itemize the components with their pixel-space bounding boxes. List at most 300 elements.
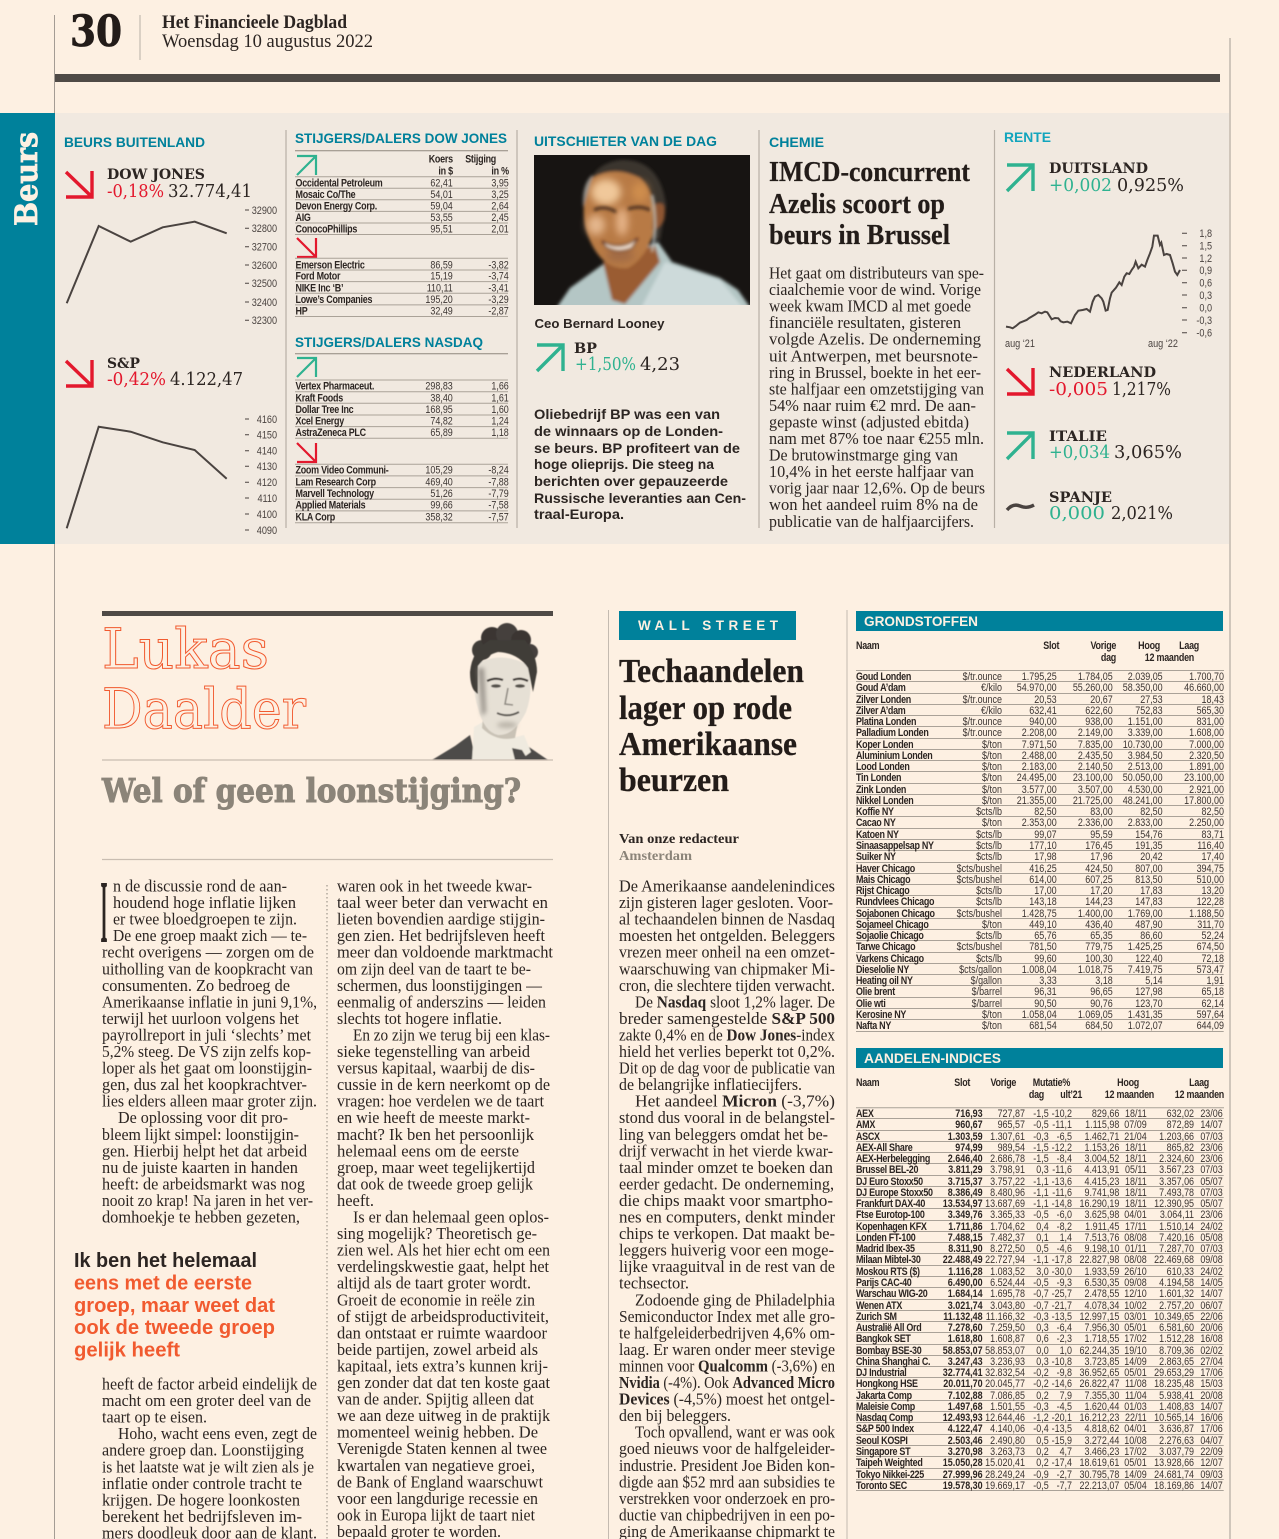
- table: Nasdaq stijgers: Kraft Foods: [296, 393, 344, 405]
- columnist name: [102, 617, 307, 741]
- table: aandelen-indices: -0,2: [1033, 1367, 1049, 1379]
- line chart: S&P: 4110: [257, 493, 277, 505]
- table: aandelen-indices: 58.853,07: [943, 1345, 983, 1357]
- text block: column part 1: Amerikaanse inflatie in juni 9,1%,: [102, 992, 317, 1011]
- text block: chemie: ciaalchemie voor de wind. Vorige: [769, 280, 981, 299]
- table: grondstoffen: 2.435,50: [1078, 750, 1113, 762]
- line chart: Duitse rente: 0,6: [1199, 278, 1212, 290]
- table: aandelen-indices: 22/06: [1200, 1311, 1223, 1323]
- table: grondstoffen: 607,25: [1085, 874, 1113, 886]
- table: aandelen-indices: 27/04: [1200, 1356, 1223, 1368]
- headline: Azelis scoort op: [769, 188, 945, 220]
- text block: column part 3: Groeit de economie in reële zin: [337, 1290, 535, 1309]
- table: aandelen-indices: 12/07: [1200, 1457, 1223, 1469]
- table: grondstoffen: 2.513,00: [1128, 761, 1163, 773]
- table: aandelen-indices: 21/04: [1124, 1131, 1147, 1143]
- text block: column part 3: ook in Europa lijkt de taart niet: [337, 1505, 535, 1524]
- table: aandelen-indices: Taipeh Weighted: [856, 1457, 923, 1469]
- table: aandelen-indices: 1.512,28: [1159, 1333, 1194, 1345]
- table: aandelen-indices: 20/06: [1200, 1322, 1223, 1334]
- table: grondstoffen: 779,75: [1085, 941, 1113, 953]
- column headers: [856, 1077, 1224, 1101]
- table: grondstoffen: 127,98: [1135, 986, 1163, 998]
- table: aandelen-indices: 2.646,40: [948, 1153, 983, 1165]
- line chart: Dow Jones: 32500: [252, 278, 277, 290]
- table: aandelen-indices: -11,6: [1052, 1187, 1072, 1199]
- table: aandelen-indices: 05/08: [1200, 1232, 1223, 1244]
- table: grondstoffen: $/ton: [982, 739, 1002, 751]
- table: Dow Jones stijgers: Occidental Petroleum: [296, 178, 383, 190]
- table: grondstoffen: Goud Londen: [856, 671, 911, 683]
- table: aandelen-indices: Londen FT-100: [856, 1232, 915, 1244]
- text block: chemie: Het gaat om distributeurs van spe-: [769, 264, 984, 282]
- table: aandelen-indices: -0,7: [1033, 1288, 1049, 1300]
- table: grondstoffen: 2.833,00: [1128, 817, 1163, 829]
- table: Dow Jones dalers: -3,74: [488, 271, 509, 283]
- text block: Wall Street article: Het aandeel Micron (-3,7%): [635, 1092, 835, 1111]
- table: grondstoffen: 17,98: [1034, 851, 1057, 863]
- table: grondstoffen: 17,96: [1090, 851, 1113, 863]
- table: Dow Jones dalers: 86,59: [430, 260, 453, 272]
- table: grondstoffen: 191,35: [1135, 840, 1163, 852]
- Italie label: ITALIE: [1049, 429, 1107, 445]
- table: grondstoffen: $/ton: [982, 750, 1002, 762]
- text block: Wall Street article: De Nasdaq sloot 1,2% lager. De: [635, 992, 835, 1011]
- text block: Wall Street article: breder samengestelde S&P 500: [619, 1009, 835, 1028]
- table: grondstoffen: 2.149,00: [1078, 727, 1113, 739]
- table: grondstoffen: 46.660,00: [1184, 682, 1224, 694]
- table: grondstoffen: $cts/lb: [976, 885, 1002, 897]
- table: grondstoffen: Koper Londen: [856, 739, 913, 751]
- table: aandelen-indices: 18.235,48: [1154, 1378, 1194, 1390]
- table: aandelen-indices: 3.798,91: [990, 1164, 1025, 1176]
- table: grondstoffen: 684,50: [1085, 1020, 1113, 1032]
- table: aandelen-indices: 3.625,98: [1084, 1209, 1119, 1221]
- text block: Wall Street article: cron, die slechtere tijden verwacht.: [619, 976, 835, 995]
- table: aandelen-indices: 1.620,44: [1084, 1401, 1119, 1413]
- headline: [619, 653, 804, 799]
- column headers: Hoog: [1138, 640, 1160, 652]
- table: grondstoffen: 17,00: [1034, 885, 1057, 897]
- table: Dow Jones stijgers: Mosaic Co/The: [296, 189, 356, 201]
- line chart: Duitse rente: 1,8: [1199, 228, 1212, 240]
- table: aandelen-indices: [856, 1108, 1224, 1492]
- table: aandelen-indices: 18.169,86: [1154, 1480, 1194, 1492]
- table: aandelen-indices: 1.408,83: [1159, 1401, 1194, 1413]
- table: Nasdaq stijgers: 1,60: [491, 404, 509, 416]
- text block: column part 2: is het laatste wat je wilt zien als je: [102, 1457, 314, 1476]
- table: grondstoffen: Kerosine NY: [856, 1009, 906, 1021]
- table: aandelen-indices: 6.490,00: [948, 1277, 983, 1289]
- table: grondstoffen: 122,28: [1197, 896, 1224, 908]
- table: aandelen-indices: -6,5: [1057, 1131, 1072, 1143]
- table: grondstoffen: 20,53: [1034, 694, 1057, 706]
- table: aandelen-indices: Nasdaq Comp: [856, 1412, 913, 1424]
- table: aandelen-indices: 02/02: [1200, 1345, 1223, 1357]
- table: Dow Jones dalers: NIKE Inc ‘B’: [296, 283, 344, 295]
- column headers: [856, 640, 1199, 664]
- date: Woensdag 10 augustus 2022: [162, 31, 373, 52]
- table: grondstoffen: 1.795,25: [1022, 671, 1057, 683]
- line chart: Duitse rente: 1,2: [1199, 253, 1212, 265]
- table: aandelen-indices: 22/11: [1125, 1412, 1147, 1424]
- table: grondstoffen: 487,90: [1135, 919, 1163, 931]
- table: Nasdaq dalers: 469,40: [425, 477, 453, 489]
- table: aandelen-indices: 18/11: [1125, 1198, 1147, 1210]
- table: aandelen-indices: -15,9: [1052, 1435, 1072, 1447]
- table: grondstoffen: €/kilo: [981, 705, 1002, 717]
- table: aandelen-indices: 1.711,86: [948, 1221, 983, 1233]
- text block: column part 3: verdelingskwestie gaat, helpt het: [337, 1257, 549, 1276]
- text block: Wall Street article: ling van beleggers omdat het be-: [619, 1125, 828, 1144]
- table: grondstoffen: 3,33: [1039, 975, 1057, 987]
- table: grondstoffen: 674,50: [1197, 941, 1224, 953]
- table: grondstoffen: $/tr.ounce: [963, 727, 1002, 739]
- table: grondstoffen: 17,20: [1090, 885, 1113, 897]
- text block: column part 3: de Bank of England waarschuwt: [337, 1472, 543, 1491]
- table: aandelen-indices: 716,93: [955, 1108, 983, 1120]
- table: aandelen-indices: Singapore ST: [856, 1446, 910, 1458]
- table: aandelen-indices: 610,33: [1167, 1266, 1194, 1278]
- Nederland value: [1049, 379, 1171, 400]
- text block: column part 2: Hoho, wacht eens even, zegt de: [118, 1424, 317, 1443]
- table header: in %: [491, 166, 509, 178]
- table: aandelen-indices: 0,1: [1036, 1232, 1049, 1244]
- table: aandelen-indices: 16/06: [1200, 1412, 1223, 1424]
- table: grondstoffen: 5,14: [1145, 975, 1163, 987]
- table: Dow Jones dalers: -3,82: [488, 260, 509, 272]
- table: Dow Jones stijgers: 95,51: [430, 224, 453, 236]
- table: grondstoffen: 7.419,75: [1128, 964, 1163, 976]
- table: aandelen-indices: 09/08: [1124, 1277, 1147, 1289]
- table: aandelen-indices: 13.687,69: [985, 1198, 1025, 1210]
- table: grondstoffen: 2.336,00: [1078, 817, 1113, 829]
- panel: aandelen-indices heading: AANDELEN-INDICES: [864, 1051, 1001, 1066]
- text block: Wall Street article: ductie van chipbedrijven in een po-: [619, 1505, 835, 1524]
- text block: column part 3: gen zonder dat dat ten koste gaat: [337, 1373, 550, 1392]
- table: grondstoffen: $cts/lb: [976, 896, 1002, 908]
- table: grondstoffen: 72,18: [1202, 953, 1224, 965]
- table: aandelen-indices: 3.064,11: [1160, 1209, 1194, 1221]
- table: aandelen-indices: 13.534,97: [943, 1198, 983, 1210]
- table: Dow Jones dalers: HP: [296, 306, 308, 318]
- panel: chemie heading: [769, 134, 970, 251]
- table: Dow Jones stijgers: 62,41: [430, 178, 453, 190]
- table: grondstoffen: 20,67: [1090, 694, 1113, 706]
- text block: column part 3: altijd als de taart groter wordt.: [337, 1274, 531, 1293]
- markets band background: [55, 113, 1229, 544]
- headline: beurs in Brussel: [769, 219, 950, 251]
- table: aandelen-indices: 2.478,55: [1084, 1288, 1119, 1300]
- table: aandelen-indices: 632,02: [1167, 1108, 1194, 1120]
- panel: grondstoffen heading: GRONDSTOFFEN: [864, 614, 978, 629]
- text block: Wall Street article: zijn gisteren lager gesloten. Voor-: [619, 893, 833, 912]
- text block: column part 3: kapitaal, iets extra’s kunnen krij-: [337, 1356, 548, 1375]
- table: grondstoffen: 622,60: [1085, 705, 1113, 717]
- line chart: Duitse rente: -0,3: [1196, 315, 1212, 327]
- table: aandelen-indices: 5.938,41: [1159, 1390, 1194, 1402]
- table: aandelen-indices: 3.365,33: [990, 1209, 1025, 1221]
- table: grondstoffen: 48.241,00: [1123, 795, 1163, 807]
- text block: column part 2: heeft de factor arbeid eindelijk de: [102, 1374, 317, 1394]
- table: aandelen-indices: 1.601,32: [1159, 1288, 1194, 1300]
- table: grondstoffen: 154,76: [1135, 829, 1163, 841]
- table: grondstoffen: 1.769,00: [1128, 908, 1163, 920]
- table: aandelen-indices: 07/03: [1200, 1187, 1223, 1199]
- table: aandelen-indices: 23/06: [1200, 1153, 1223, 1165]
- table: grondstoffen: 82,50: [1140, 806, 1163, 818]
- table: aandelen-indices: Bombay BSE-30: [856, 1345, 921, 1357]
- table: grondstoffen: 2.140,50: [1078, 761, 1113, 773]
- table: aandelen-indices: 1.116,28: [948, 1266, 983, 1278]
- table: aandelen-indices: 3.272,44: [1084, 1435, 1119, 1447]
- table: Nasdaq dalers: [295, 464, 509, 524]
- table: aandelen-indices: 7.259,50: [990, 1322, 1025, 1334]
- table: grondstoffen: 99,07: [1034, 829, 1057, 841]
- table: grondstoffen: 144,23: [1085, 896, 1113, 908]
- table: aandelen-indices: -0,9: [1033, 1468, 1049, 1480]
- table: aandelen-indices: 3.021,74: [948, 1300, 983, 1312]
- line chart: Dow Jones: [67, 205, 277, 327]
- line chart: Duitse rente: aug ‘21: [1005, 338, 1035, 350]
- table: aandelen-indices: -21,7: [1052, 1300, 1072, 1312]
- table: aandelen-indices: 12.997,15: [1079, 1311, 1119, 1323]
- text block: column part 3: gen zien. Het bedrijfsleven heeft: [337, 926, 545, 945]
- table: grondstoffen: 813,50: [1135, 874, 1163, 886]
- table: grondstoffen: 3.577,00: [1022, 784, 1057, 796]
- text block: Wall Street article: drijf verwacht in het vierde kwar-: [619, 1141, 833, 1160]
- table: grondstoffen: 86,60: [1140, 930, 1163, 942]
- text block: column part 3: kwartalen van negatieve groei,: [337, 1456, 535, 1475]
- table: aandelen-indices: 22.727,94: [985, 1254, 1025, 1266]
- text block: column part 3: vragen: hoe verdelen we de taart: [337, 1092, 544, 1111]
- table: grondstoffen: Lood Londen: [856, 761, 910, 773]
- panel: uitschieter van de dag: [534, 133, 750, 522]
- column headers: Vorige: [1090, 640, 1117, 652]
- line chart: S&P: 4140: [257, 446, 277, 458]
- S&P value: 4.122,47: [170, 369, 243, 390]
- text block: Wall Street article: den bij beleggers.: [619, 1406, 731, 1425]
- table: aandelen-indices: 3.715,37: [948, 1176, 983, 1188]
- table: aandelen-indices: 18/11: [1125, 1153, 1147, 1165]
- table: grondstoffen: Katoen NY: [856, 829, 899, 841]
- text block: column part 3: we aan deze uitweg in de praktijk: [337, 1406, 551, 1425]
- text block: column part 3: eenmalig of anderszins — leiden: [337, 992, 546, 1011]
- table: grondstoffen: [856, 671, 1224, 1032]
- text block: BP: Russische leveranties aan Cen-: [534, 490, 746, 506]
- heading: BEURS BUITENLAND: [64, 134, 205, 150]
- table: aandelen-indices: 11/08: [1125, 1378, 1147, 1390]
- icon: green arrow up: [297, 156, 316, 175]
- table: grondstoffen: 1.072,07: [1128, 1020, 1163, 1032]
- panel: aandelen-indices heading: [856, 1048, 1224, 1108]
- text block: column part 1: De oplossing voor dit pro-: [118, 1108, 288, 1127]
- table: aandelen-indices: 1.153,26: [1084, 1142, 1119, 1154]
- table: grondstoffen: 1.018,75: [1078, 964, 1113, 976]
- table: grondstoffen: 90,50: [1034, 998, 1057, 1010]
- table: Nasdaq stijgers: 65,89: [430, 427, 453, 439]
- table: aandelen-indices: 3.004,52: [1084, 1153, 1119, 1165]
- table: grondstoffen: 27,53: [1140, 694, 1163, 706]
- table: aandelen-indices: 17/02: [1124, 1333, 1147, 1345]
- text block: Wall Street article: Toch opvallend, want er was ook: [635, 1423, 836, 1442]
- table: aandelen-indices: 974,99: [955, 1142, 983, 1154]
- table: grondstoffen: Sojameel Chicago: [856, 919, 929, 931]
- table: grondstoffen: 95,59: [1090, 829, 1113, 841]
- table: grondstoffen: Zilver Londen: [856, 694, 911, 706]
- table: aandelen-indices: 3.236,93: [990, 1356, 1025, 1368]
- table: aandelen-indices: 0,3: [1036, 1322, 1049, 1334]
- table: aandelen-indices: 0,0: [1036, 1345, 1049, 1357]
- table: Nasdaq dalers: Applied Materials: [296, 500, 366, 512]
- table: Nasdaq dalers: -7,88: [488, 477, 509, 489]
- table: aandelen-indices: 14/07: [1200, 1119, 1223, 1131]
- table: grondstoffen: 54.970,00: [1017, 682, 1057, 694]
- table: aandelen-indices: -0,2: [1033, 1378, 1049, 1390]
- table: aandelen-indices: Tokyo Nikkei-225: [856, 1468, 924, 1480]
- text block: column part 2: krijgen. De hogere loonkosten: [102, 1490, 300, 1509]
- table: Nasdaq dalers: -7,58: [488, 500, 509, 512]
- table: aandelen-indices: 0,2: [1036, 1446, 1049, 1458]
- line chart: Duitse rente: 0,9: [1199, 265, 1212, 277]
- table: grondstoffen: 449,10: [1029, 919, 1057, 931]
- table: grondstoffen: 58.350,00: [1123, 682, 1163, 694]
- table: aandelen-indices: -1,5: [1033, 1142, 1049, 1154]
- text block: BP: berichten over gepauzeerde: [534, 473, 728, 489]
- table: grondstoffen: 1.700,70: [1189, 671, 1224, 683]
- table: aandelen-indices: 8.311,90: [948, 1243, 983, 1255]
- text block: Wall Street article: Semiconductor Index met alle gro-: [619, 1307, 835, 1326]
- table: aandelen-indices: 1.501,55: [990, 1401, 1025, 1413]
- text block: chemie: De brutowinstmarge ging van: [769, 446, 958, 465]
- table: aandelen-indices: 07/09: [1124, 1119, 1147, 1131]
- table: grondstoffen: 1.608,00: [1189, 727, 1224, 739]
- table: grondstoffen: $/barrel: [972, 986, 1002, 998]
- table: aandelen-indices: Moskou RTS ($): [856, 1266, 920, 1278]
- Spanje value: 2,021%: [1111, 503, 1173, 524]
- table: aandelen-indices: 10.349,65: [1154, 1311, 1194, 1323]
- table: aandelen-indices: 0,3: [1036, 1356, 1049, 1368]
- text block: column part 3: momenteel weinig hebben. De: [337, 1423, 538, 1442]
- table: aandelen-indices: 3.723,85: [1084, 1356, 1119, 1368]
- Italie value: +0,034: [1049, 442, 1110, 463]
- table: aandelen-indices: 10/02: [1124, 1300, 1147, 1312]
- table: Nasdaq dalers: -8,24: [488, 465, 509, 477]
- table: aandelen-indices: 3.247,43: [948, 1356, 983, 1368]
- heading: RENTE: [1004, 129, 1051, 145]
- Duitsland value: 0,925%: [1117, 175, 1184, 196]
- table: aandelen-indices: -0,5: [1033, 1480, 1049, 1492]
- section tab: WALL STREET: [638, 618, 779, 633]
- panel: grondstoffen heading: [856, 611, 1224, 671]
- text block: column part 1: gen, dus zal het koopkrachtver-: [102, 1075, 307, 1094]
- section tab: [619, 611, 796, 640]
- table: grondstoffen: Zilver A’dam: [856, 705, 905, 717]
- table: aandelen-indices: 0,4: [1036, 1221, 1049, 1233]
- table: grondstoffen: $/ton: [982, 795, 1002, 807]
- column headers: ult’21: [1060, 1089, 1083, 1101]
- table: Nasdaq stijgers: Vertex Pharmaceut.: [296, 381, 375, 393]
- headline: Amerikaanse: [619, 726, 797, 763]
- text block: column part 3: helemaal eens om de eerste: [337, 1141, 519, 1160]
- table: aandelen-indices: 4.413,91: [1084, 1164, 1119, 1176]
- table: aandelen-indices: 24.681,74: [1154, 1468, 1194, 1480]
- table: aandelen-indices: 1.704,62: [990, 1221, 1025, 1233]
- table: aandelen-indices: 19.669,17: [985, 1480, 1025, 1492]
- table: aandelen-indices: DJ Industrial: [856, 1367, 907, 1379]
- table: aandelen-indices: 4.122,47: [948, 1423, 983, 1435]
- text block: column part 3: sieke tegenstelling van arbeid: [337, 1042, 531, 1061]
- table: grondstoffen: $cts/lb: [976, 829, 1002, 841]
- columnist name: Daalder: [102, 677, 307, 741]
- table: aandelen-indices: 04/07: [1200, 1435, 1223, 1447]
- table: aandelen-indices: 965,57: [998, 1119, 1025, 1131]
- text block: column part 3: schermen, dus loonstijgingen —: [337, 976, 542, 995]
- table: aandelen-indices: 1.608,87: [990, 1333, 1025, 1345]
- table: aandelen-indices: Toronto SEC: [856, 1480, 907, 1492]
- text block: column part 3: versus kapitaal, waarbij de dis-: [337, 1059, 535, 1078]
- text block: Wall Street article: te halfgeleiderbedrijven 4,6% om-: [619, 1323, 835, 1342]
- BP label: BP: [574, 341, 597, 357]
- table: Nasdaq dalers: 105,29: [425, 465, 453, 477]
- table: grondstoffen: 20,42: [1140, 851, 1163, 863]
- column headers: dag: [1029, 1089, 1044, 1101]
- table: aandelen-indices: 2.503,46: [948, 1435, 983, 1447]
- Nederland value: -0,005: [1049, 379, 1108, 400]
- table: aandelen-indices: Ftse Eurotop-100: [856, 1209, 925, 1221]
- table: aandelen-indices: -0,3: [1033, 1401, 1049, 1413]
- text block: Wall Street article: minnen voor Qualcomm (-3,6%) en: [619, 1356, 835, 1375]
- table: Nasdaq dalers: 358,32: [425, 512, 453, 524]
- table: aandelen-indices: -1,5: [1033, 1108, 1049, 1120]
- table: aandelen-indices: Parijs CAC-40: [856, 1277, 911, 1289]
- text block: column part 1: terwijl het uurloon volgens het: [102, 1009, 299, 1028]
- text block: column part 1: De ene groep maakt zich — te-: [113, 926, 307, 945]
- table: aandelen-indices: -13,5: [1052, 1311, 1072, 1323]
- table: aandelen-indices: Kopenhagen KFX: [856, 1221, 927, 1233]
- table: aandelen-indices: 7.493,78: [1159, 1187, 1194, 1199]
- table: aandelen-indices: 19/10: [1124, 1345, 1147, 1357]
- table: grondstoffen: 3,18: [1095, 975, 1113, 987]
- table: grondstoffen: 10.730,00: [1123, 739, 1163, 751]
- table: aandelen-indices: 1.203,66: [1159, 1131, 1194, 1143]
- line chart: Dow Jones: 32600: [252, 260, 277, 272]
- table: aandelen-indices: 15/03: [1200, 1378, 1223, 1390]
- table: aandelen-indices: 14/09: [1124, 1356, 1147, 1368]
- text block: Wall Street article: al techaandelen binnen de Nasdaq: [619, 910, 835, 929]
- table: grondstoffen: 1.891,00: [1189, 761, 1224, 773]
- table: grondstoffen: 17,83: [1140, 885, 1163, 897]
- Duitsland value: [1049, 175, 1184, 196]
- table: aandelen-indices: 07/03: [1200, 1131, 1223, 1143]
- table: aandelen-indices: 18/11: [1125, 1176, 1147, 1188]
- table: aandelen-indices: AEX: [856, 1108, 874, 1120]
- table: grondstoffen: 2.320,50: [1189, 750, 1224, 762]
- table: aandelen-indices: 20/08: [1200, 1390, 1223, 1402]
- table: aandelen-indices: -0,5: [1033, 1277, 1049, 1289]
- page header: [55, 7, 1220, 82]
- table: aandelen-indices: 1.303,59: [948, 1131, 983, 1143]
- headline: beurzen: [619, 762, 729, 799]
- table: Dow Jones dalers: 32,49: [430, 306, 453, 318]
- table: grondstoffen: $/ton: [982, 1009, 1002, 1021]
- table: aandelen-indices: 18/11: [1125, 1187, 1147, 1199]
- table: Nasdaq dalers: Marvell Technology: [296, 488, 375, 500]
- table: aandelen-indices: 12/10: [1124, 1288, 1147, 1300]
- table: aandelen-indices: -0,4: [1033, 1423, 1049, 1435]
- table: aandelen-indices: -2,7: [1057, 1468, 1072, 1480]
- table: grondstoffen: 21.355,00: [1017, 795, 1057, 807]
